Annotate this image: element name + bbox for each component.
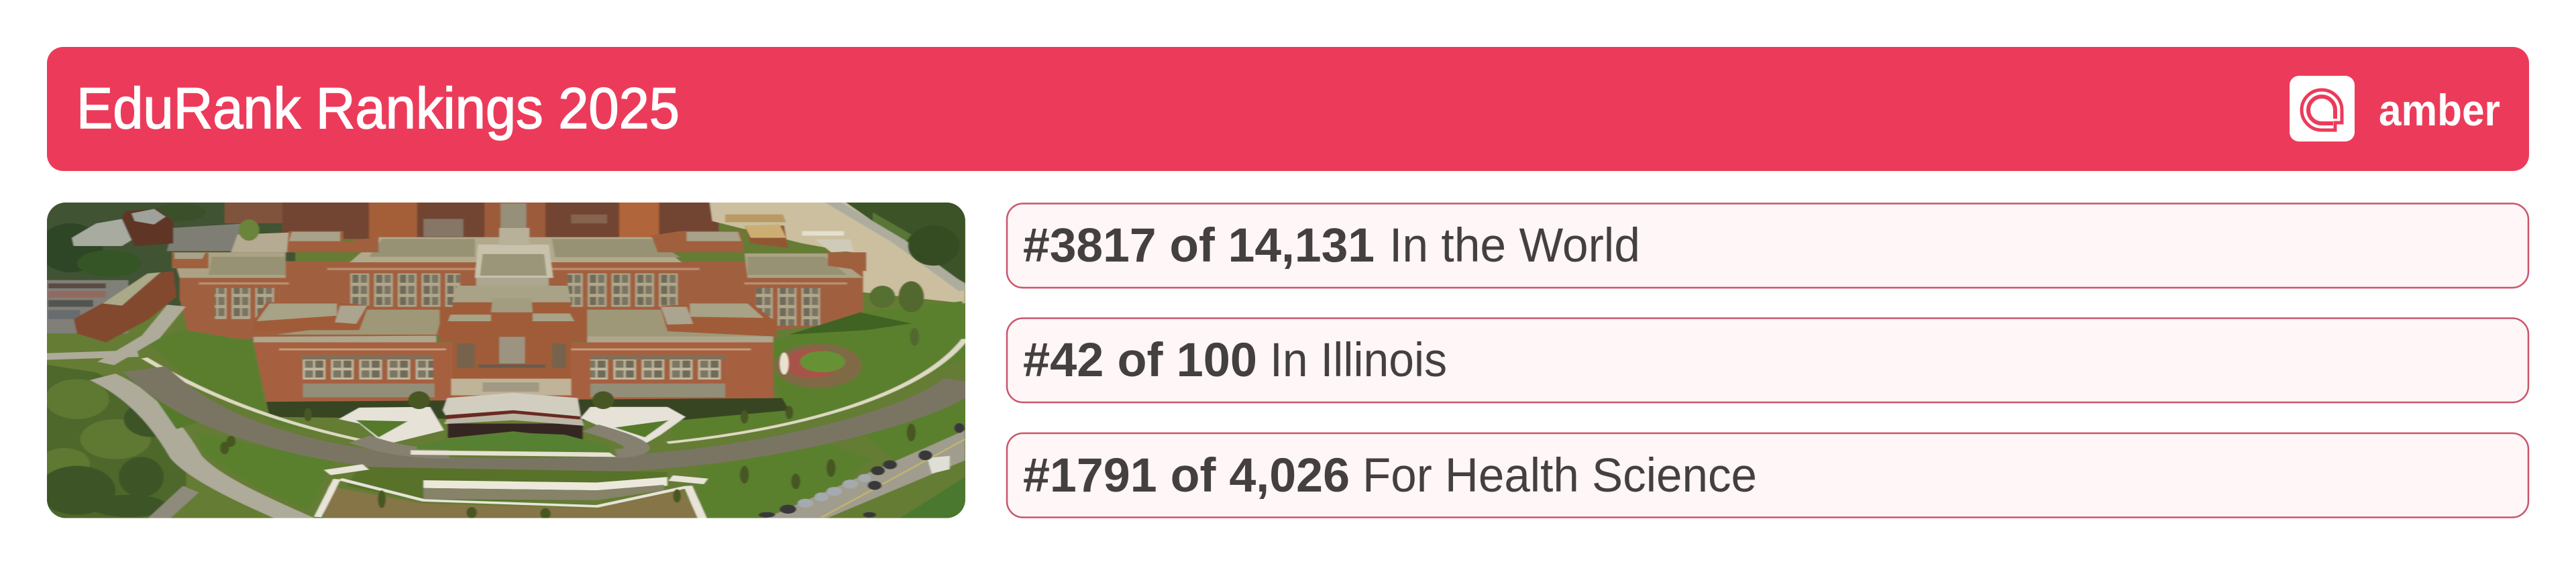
photo: aerial view of hospital campus xyxy=(38,199,965,522)
left campus road xyxy=(38,306,302,522)
upper pavilions xyxy=(287,231,378,252)
upper left trees xyxy=(38,199,295,306)
canopy and drop off xyxy=(448,424,583,439)
world rank value: #3817 of 14,131 xyxy=(1023,219,1375,272)
left forest xyxy=(38,363,186,522)
front central tower xyxy=(439,310,588,342)
lower lawns xyxy=(196,432,333,510)
world rank label: In the World xyxy=(1389,219,1640,272)
central tower xyxy=(475,245,553,278)
title: EduRank Rankings 2025 xyxy=(76,76,680,141)
front corner pavilions and roofs xyxy=(254,302,370,319)
ring road xyxy=(144,369,965,466)
ranking row: illinois xyxy=(1007,318,2528,402)
left long brick building xyxy=(74,271,176,343)
health science rank label: For Health Science xyxy=(1362,449,1757,502)
scattered trees xyxy=(220,392,916,519)
ranking row: health science xyxy=(1007,433,2528,518)
illinois rank label: In Illinois xyxy=(1270,334,1447,387)
lower right road and cars xyxy=(763,431,965,519)
grey roof mansion xyxy=(122,209,173,246)
lower plaza hedge tiers xyxy=(347,467,667,502)
right trees xyxy=(869,286,895,308)
icon: amber logo xyxy=(2290,76,2355,142)
lawns around building xyxy=(149,330,327,434)
logo wordmark: amber xyxy=(2379,85,2500,135)
upper brick block xyxy=(180,261,863,339)
circular garden xyxy=(775,343,862,388)
front block wall xyxy=(254,343,773,402)
shrub band xyxy=(266,398,796,421)
top right light zone xyxy=(709,199,965,303)
ranking row: world xyxy=(1007,204,2528,288)
header banner xyxy=(47,47,2529,171)
white plazas xyxy=(339,407,444,445)
entrance xyxy=(451,379,571,395)
ring road curb xyxy=(144,358,366,441)
left parking lot xyxy=(38,280,128,333)
upper block window groups xyxy=(350,274,460,306)
illinois rank value: #42 of 100 xyxy=(1023,334,1257,387)
upper block roofs xyxy=(172,252,286,278)
parking top xyxy=(166,224,241,251)
back buildings xyxy=(224,203,283,224)
top right road and trees xyxy=(841,199,965,284)
health science rank value: #1791 of 4,026 xyxy=(1023,449,1350,502)
central oval lawn xyxy=(417,433,610,451)
